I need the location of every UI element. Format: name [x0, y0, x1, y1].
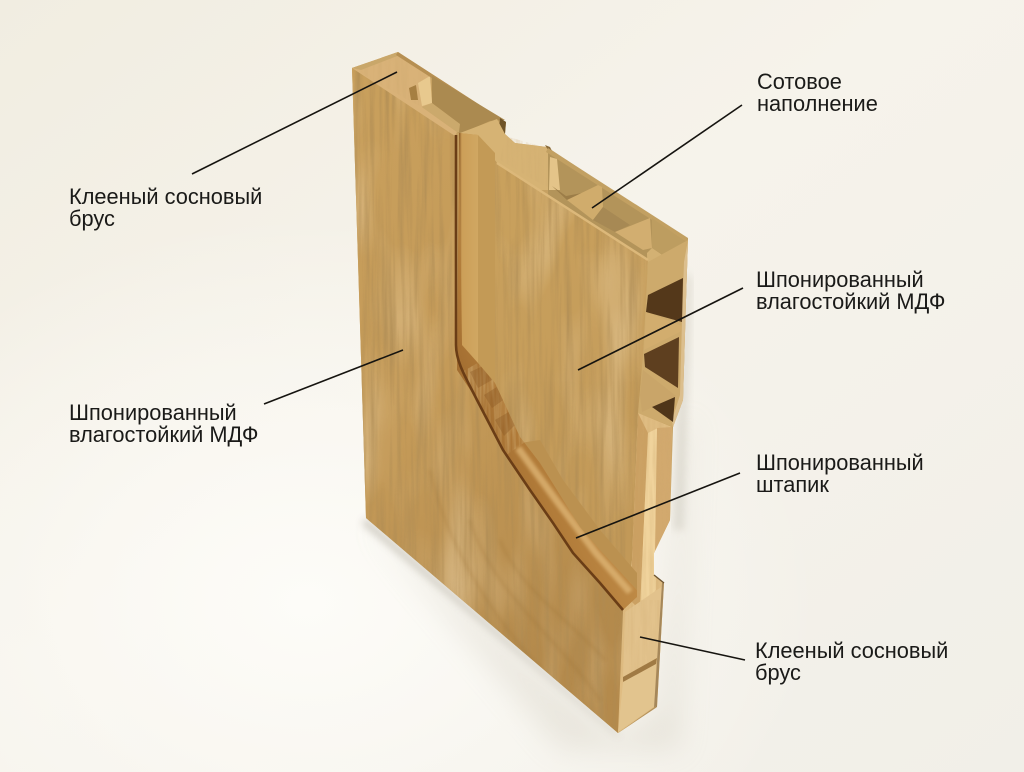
- label: veneered moisture-resistant MDF, left: Шпонированный: [69, 400, 237, 425]
- honeycomb filling: [546, 148, 688, 293]
- label: veneered moisture-resistant MDF, right: влагостойкий МДФ: [756, 289, 945, 314]
- label: veneered moisture-resistant MDF, right: Шпонированный: [756, 267, 924, 292]
- leader line: honeycomb filling: [592, 105, 742, 208]
- leader line: top pine block: [192, 72, 397, 174]
- bead top profile: [460, 119, 553, 190]
- label: veneered moisture-resistant MDF, left: влагостойкий МДФ: [69, 422, 258, 447]
- label: honeycomb filling: наполнение: [757, 91, 878, 116]
- right veneered MDF face: [495, 160, 648, 566]
- label: glued pine beam, top left: брус: [69, 206, 115, 231]
- glazing bead: [456, 133, 637, 610]
- door silhouette base: [352, 52, 688, 733]
- label: glued pine beam, bottom right: брус: [755, 660, 801, 685]
- door cross-section: [340, 50, 688, 750]
- leader line: glazing bead: [576, 473, 740, 538]
- label: veneered glazing bead: штапик: [756, 472, 829, 497]
- leader line: bottom pine block: [640, 637, 745, 660]
- label: glued pine beam, bottom right: Клееный сосновый: [755, 638, 948, 663]
- label: glued pine beam, top left: Клееный сосновый: [69, 184, 262, 209]
- right edge with openings: [638, 240, 688, 427]
- left veneered MDF face: [352, 68, 623, 733]
- leader line: right veneered MDF: [578, 288, 743, 370]
- label: honeycomb filling: Сотовое: [757, 69, 842, 94]
- top cavity: [422, 76, 506, 134]
- top pine block: [352, 52, 500, 136]
- label: veneered glazing bead: Шпонированный: [756, 450, 924, 475]
- pine stile: [618, 410, 675, 735]
- door shadow: [362, 270, 692, 750]
- leader line: left veneered MDF: [264, 350, 403, 404]
